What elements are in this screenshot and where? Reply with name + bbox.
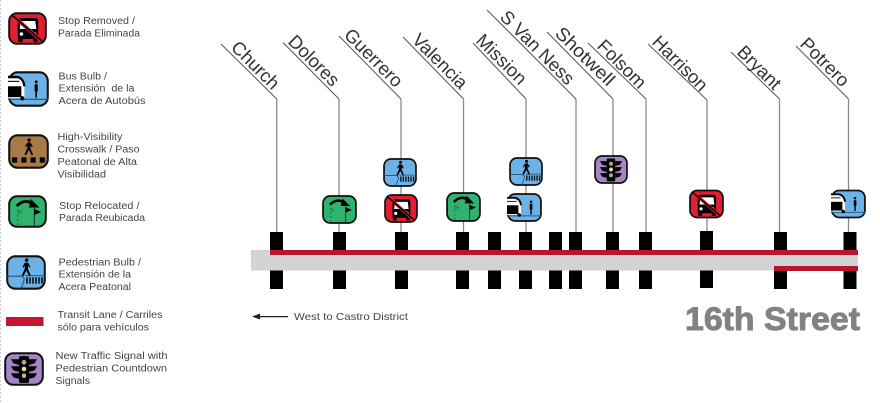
icon: stop relocated — [9, 196, 46, 227]
label: Dolores: Dolores — [284, 30, 344, 90]
text: west to Castro District: West to Castro District — [294, 311, 408, 323]
title: 16th Street — [685, 301, 860, 337]
legend item: new traffic signal — [5, 351, 168, 387]
label: Guerrero: Guerrero — [340, 24, 407, 91]
icon: Mission bus bulb — [507, 194, 541, 221]
icon: stop removed — [9, 13, 46, 44]
legend text: pedestrian bulb: Extensión de la — [58, 270, 131, 281]
legend item: stop relocated — [9, 196, 145, 227]
label: Shotwell: Shotwell — [551, 22, 619, 90]
legend text: stop removed: Parada Eliminada — [58, 29, 140, 40]
label: Harrison: Harrison — [648, 31, 712, 95]
legend text: high-visibility crosswalk: High-Visibility — [58, 132, 122, 143]
label: S Van Ness: S Van Ness — [496, 6, 579, 89]
legend item: bus bulb — [8, 72, 146, 107]
label: Bryant: Bryant — [733, 41, 786, 94]
arrow: west — [252, 314, 288, 320]
icon: bus bulb — [8, 72, 48, 106]
direction note — [252, 311, 408, 323]
legend text: transit lane: Transit Lane / Carriles — [58, 310, 162, 321]
legend text: transit lane: sólo para vehículos — [58, 323, 149, 334]
legend text: pedestrian bulb: Pedestrian Bulb / — [58, 258, 141, 269]
panel: legend — [5, 13, 168, 387]
label: Folsom: Folsom — [593, 35, 651, 93]
street labels — [227, 6, 854, 95]
street diagram — [251, 231, 858, 289]
icon: pedestrian bulb — [7, 256, 45, 289]
icon: transit lane swatch — [6, 317, 44, 326]
icon: Guerrero stop removed — [385, 195, 417, 222]
legend text: bus bulb: Acera de Autobús — [58, 96, 146, 107]
legend text: new traffic signal: Pedestrian Countdown — [56, 364, 167, 375]
legend text: new traffic signal: New Traffic Signal with — [56, 351, 168, 362]
icon: Folsom traffic signal — [595, 156, 627, 183]
icon: Guerrero pedestrian bulb — [384, 159, 416, 186]
legend item: pedestrian bulb — [7, 256, 141, 293]
icon: Potrero bus bulb — [831, 191, 865, 217]
legend text: pedestrian bulb: Acera Peatonal — [58, 282, 131, 293]
map icons — [323, 156, 865, 223]
legend text: bus bulb: Bus Bulb / — [58, 72, 107, 82]
legend text: stop removed: Stop Removed / — [58, 16, 135, 27]
road band — [251, 250, 858, 270]
icon: Harrison stop removed — [690, 191, 723, 217]
legend text: high-visibility crosswalk: Crosswalk / Paso — [58, 145, 140, 156]
legend text: bus bulb: Extensión de la — [58, 84, 135, 95]
icon: Valencia stop relocated — [447, 193, 480, 221]
icon: Dolores stop relocated — [323, 196, 356, 223]
label: Potrero: Potrero — [796, 33, 854, 91]
legend text: stop relocated: Stop Relocated / — [59, 201, 140, 212]
legend text: high-visibility crosswalk: Peatonal de Alta — [58, 157, 137, 168]
legend item: high-visibility crosswalk — [9, 132, 140, 181]
transit lane: westbound — [270, 250, 858, 255]
legend item: stop removed — [9, 13, 140, 44]
label: Church: Church — [227, 36, 284, 94]
icon: Mission pedestrian bulb — [510, 158, 542, 185]
legend text: high-visibility crosswalk: Visibilidad — [58, 170, 106, 181]
transit lane: eastbound — [774, 266, 858, 271]
legend text: stop relocated: Parada Reubicada — [59, 213, 145, 224]
street leader lines — [221, 10, 848, 232]
label: Valencia: Valencia — [408, 29, 473, 94]
icon: new traffic signal — [5, 353, 43, 385]
label: Mission: Mission — [472, 29, 531, 89]
legend text: new traffic signal: Signals — [56, 376, 90, 387]
legend item: transit lane — [6, 310, 162, 334]
icon: high-visibility crosswalk — [9, 135, 48, 168]
cross-street blocks — [270, 231, 856, 289]
